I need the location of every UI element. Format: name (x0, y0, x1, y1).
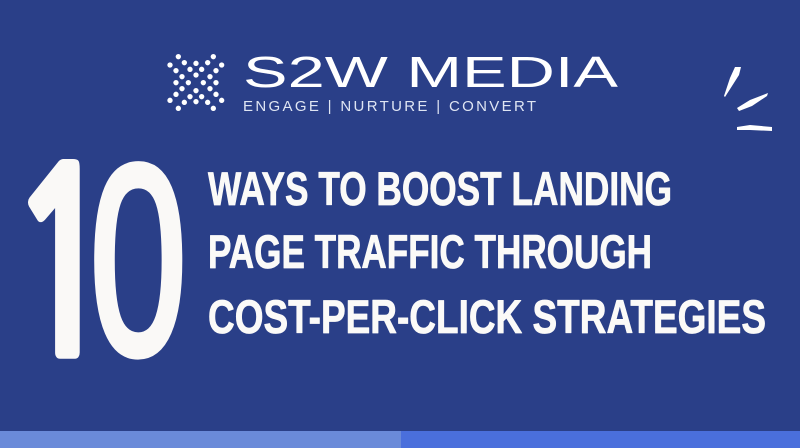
logo: S2W Media (167, 48, 619, 115)
title line 2: PAGE TRAFFIC THROUGH (208, 225, 652, 278)
bottom bar left segment (0, 431, 401, 448)
icon: spark strokes (724, 67, 772, 131)
title (208, 162, 766, 343)
digit 0: 0 (90, 109, 186, 410)
icon: dotted X logo mark (167, 54, 224, 111)
digit 1: 1 (6, 141, 120, 394)
bottom bar (0, 431, 800, 448)
logo wordmark: S2W MEDIA (243, 48, 619, 97)
bottom bar right segment (401, 431, 800, 448)
big number 10 (6, 109, 186, 410)
logo tagline: ENGAGE | NURTURE | CONVERT (243, 98, 536, 115)
